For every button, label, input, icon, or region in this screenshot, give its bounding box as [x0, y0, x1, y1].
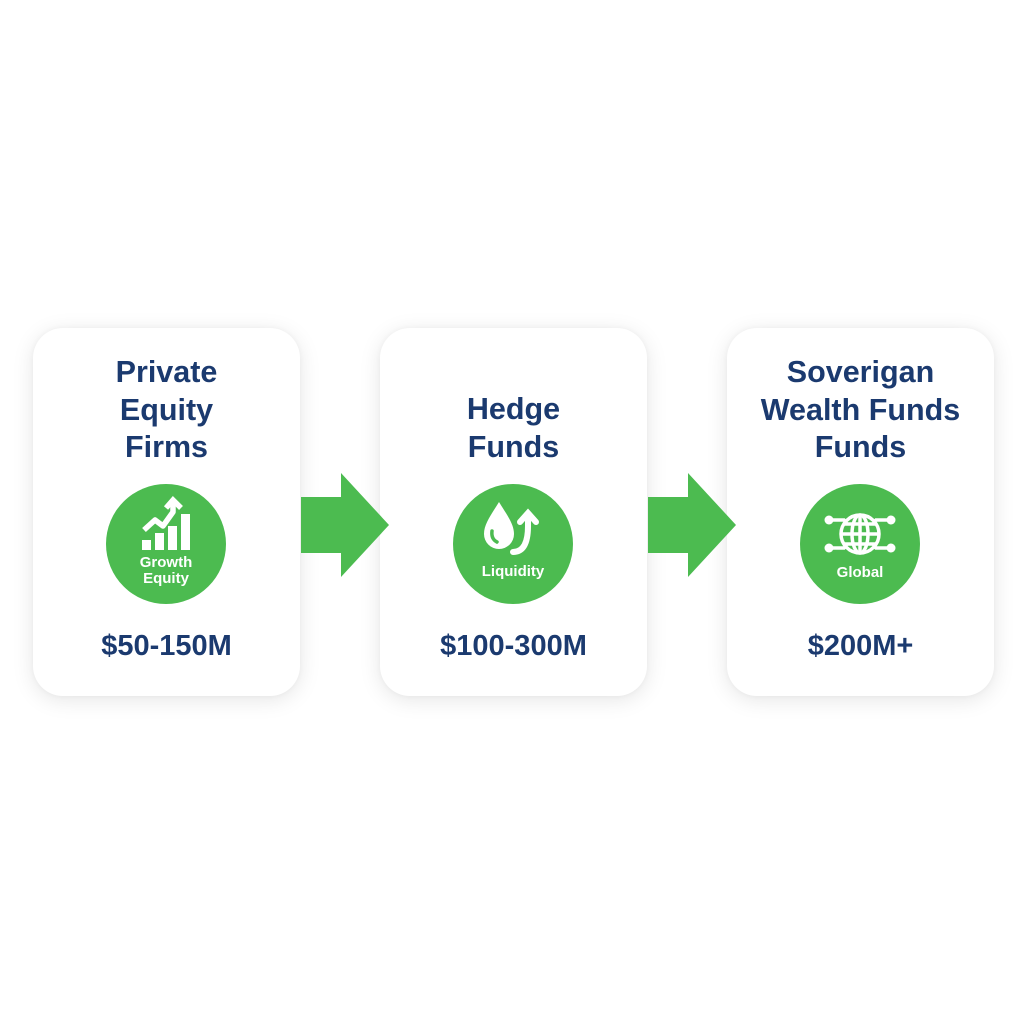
icon: liquidity	[453, 484, 573, 604]
icon: growth equity	[106, 484, 226, 604]
price: $100-300M	[440, 630, 587, 662]
title	[760, 355, 960, 464]
title	[116, 355, 217, 464]
price: $200M+	[808, 630, 913, 662]
title: Funds	[815, 430, 906, 464]
title: Soverigan	[787, 355, 934, 389]
card: private equity	[33, 328, 300, 696]
price: $50-150M	[101, 630, 232, 662]
title: Hedge	[467, 392, 560, 426]
title: Private	[116, 355, 217, 389]
icon: global: Global	[837, 564, 883, 581]
icon: growth equity: Equity	[143, 570, 189, 587]
title: Firms	[125, 430, 208, 464]
title: Equity	[120, 392, 213, 426]
arrow 2	[648, 473, 736, 577]
card: hedge funds	[380, 328, 647, 696]
card: sovereign wealth funds	[727, 328, 994, 696]
title	[467, 392, 560, 464]
icon: global	[800, 484, 920, 604]
title: Wealth Funds	[761, 392, 960, 426]
title: Funds	[468, 430, 559, 464]
arrow 1	[301, 473, 389, 577]
icon: liquidity: Liquidity	[482, 563, 544, 580]
icon: growth equity: Growth	[140, 554, 192, 571]
